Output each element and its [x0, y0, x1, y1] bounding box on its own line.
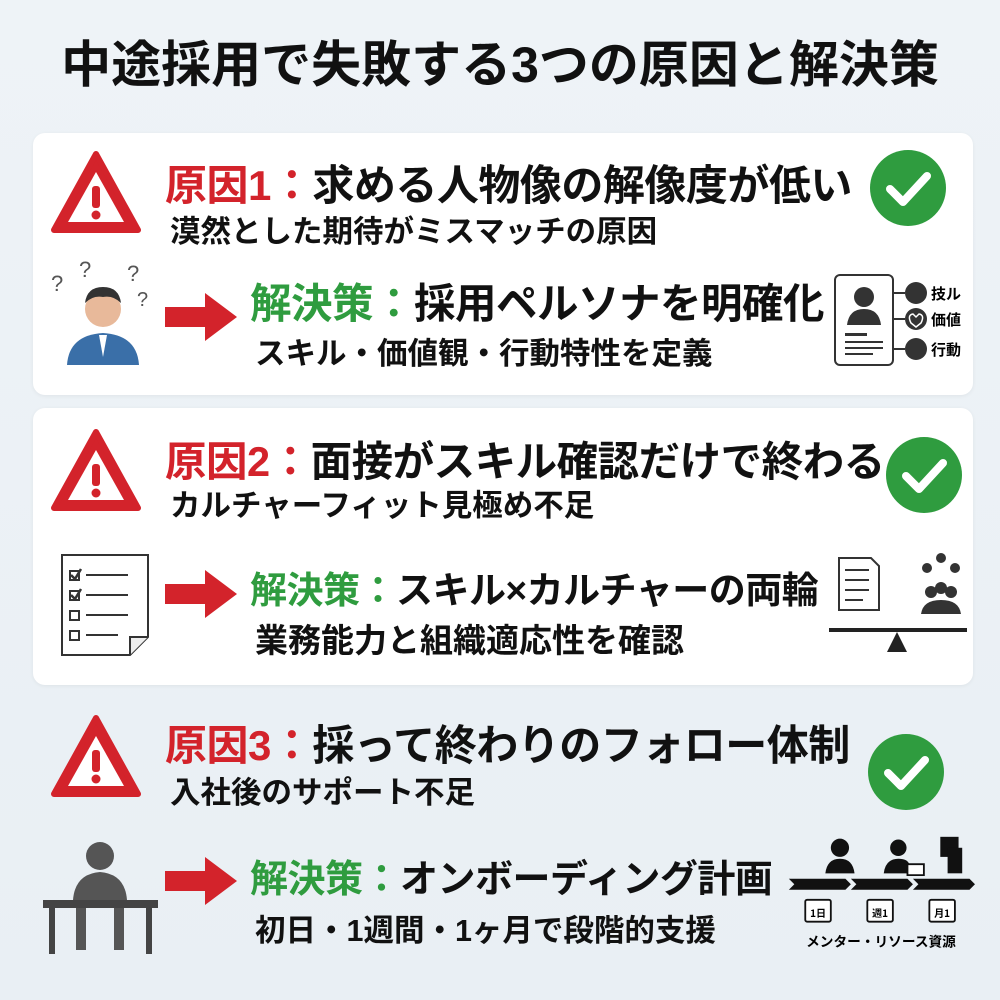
- panel: cause 1: [33, 133, 973, 395]
- solution detail: 初日・1週間・1ヶ月で段階的支援: [255, 914, 716, 948]
- icon: person at desk: [43, 842, 158, 954]
- solution: 解決策：採用ペルソナを明確化: [250, 280, 824, 327]
- icon: persona card: [834, 274, 961, 366]
- subtitle: カルチャーフィット見極め不足: [170, 489, 594, 523]
- icon: onboarding timeline: メンター・リソース資源: [806, 930, 956, 950]
- subtitle: 漠然とした期待がミスマッチの原因: [170, 215, 657, 249]
- arrow: [165, 570, 237, 618]
- solution: 解決策：オンボーディング計画: [250, 859, 772, 901]
- heading: 原因1：求める人物像の解像度が低い: [165, 162, 852, 209]
- icon: onboarding timeline: 1日: [810, 905, 826, 920]
- heading: 原因3：採って終わりのフォロー体制: [165, 722, 850, 769]
- icon: warning: [51, 151, 141, 233]
- icon: warning: [51, 429, 141, 511]
- icon: onboarding timeline: 月1: [934, 905, 950, 920]
- icon: check: [870, 150, 946, 226]
- icon: persona card: 行動: [931, 339, 961, 360]
- icon: confused person: ?: [51, 271, 63, 296]
- panel: cause 3: [43, 715, 975, 954]
- icon: warning: [51, 715, 141, 797]
- icon: persona card: 技ル: [931, 283, 961, 304]
- panel: cause 2: [33, 408, 973, 685]
- icon: confused person: ?: [127, 261, 139, 286]
- subtitle: 入社後のサポート不足: [170, 776, 475, 810]
- icon: persona card: 価値: [931, 309, 961, 330]
- icon: check: [886, 437, 962, 513]
- icon: confused person: ?: [137, 289, 148, 311]
- heading: 原因2：面接がスキル確認だけで終わる: [165, 438, 885, 485]
- arrow: [165, 293, 237, 341]
- solution detail: スキル・価値観・行動特性を定義: [255, 337, 712, 371]
- arrow: [165, 857, 237, 905]
- icon: check: [868, 734, 944, 810]
- solution: 解決策：スキル×カルチャーの両輪: [250, 570, 818, 611]
- icon: confused person: [51, 261, 148, 365]
- title: 中途採用で失敗する3つの原因と解決策: [61, 37, 939, 93]
- icon: onboarding timeline: 週1: [872, 905, 888, 920]
- solution detail: 業務能力と組織適応性を確認: [255, 622, 684, 659]
- icon: checklist: [61, 554, 149, 656]
- icon: onboarding timeline: [788, 836, 975, 950]
- icon: balance: [829, 553, 967, 652]
